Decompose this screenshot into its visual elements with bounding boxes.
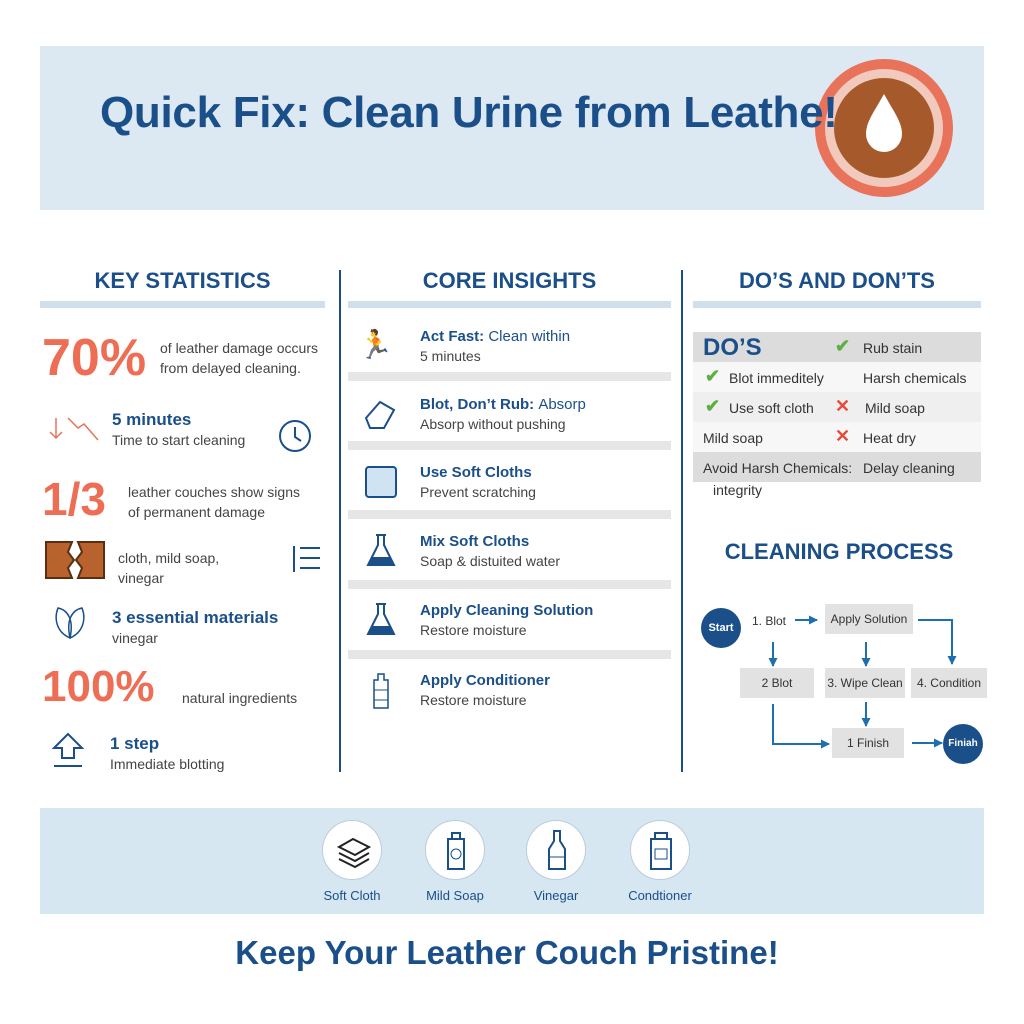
stat 100%: 100% [42, 662, 155, 711]
dos table: ✕ [835, 396, 850, 416]
insight 3 [365, 464, 536, 500]
insight 4: Mix Soft Cloths [420, 533, 529, 550]
stat 1/3: of permanent damage [128, 504, 265, 520]
flowchart: 4. Condition [917, 676, 981, 690]
dos table: Delay cleaning [863, 460, 955, 476]
material: soft cloth [322, 820, 382, 903]
dos table: Avoid Harsh Chemicals: [703, 460, 852, 476]
panel: do's and don'ts: DO’S AND DON’TS [739, 268, 935, 293]
insight 6: Restore moisture [420, 692, 527, 708]
insight 5: Restore moisture [420, 622, 527, 638]
insight 3: Prevent scratching [420, 484, 536, 500]
insight 4: Soap & distuited water [420, 553, 560, 569]
insight 6: Apply Conditioner [420, 672, 550, 689]
insight 5 [366, 602, 593, 638]
flowchart: Finiah [948, 738, 978, 749]
stat 70%: 70% [42, 329, 146, 387]
stat 70% [42, 329, 318, 387]
insight 3: Use Soft Cloths [420, 464, 532, 481]
stat essential: vinegar [112, 630, 158, 646]
material: soft cloth: Soft Cloth [323, 888, 381, 903]
dos table: ✔ [705, 396, 720, 416]
dos table: ✔ [705, 366, 720, 386]
stat 1 step: 1 step [110, 734, 159, 753]
dos table: ✔ [835, 336, 850, 356]
dos table: Mild soap [703, 430, 763, 446]
insight 4 [366, 533, 560, 569]
dos table: Heat dry [863, 430, 916, 446]
stat essential: 3 essential materials [112, 608, 278, 627]
header panel [40, 46, 984, 210]
stat 1 step [52, 732, 224, 772]
material: conditioner: Condtioner [628, 888, 692, 903]
dos table: Rub stain [863, 340, 922, 356]
footer tagline: Keep Your Leather Couch Pristine! [235, 934, 779, 971]
flowchart: Apply Solution [831, 612, 907, 626]
title: Quick Fix: Clean Urine from Leathe! [100, 88, 838, 137]
stat 1/3: 1/3 [42, 473, 106, 525]
material: vinegar [526, 820, 586, 903]
insight 1: 5 minutes [420, 348, 481, 364]
stat 5 minutes: 5 minutes [112, 410, 191, 429]
flowchart: 3. Wipe Clean [827, 676, 903, 690]
stat 1/3 [42, 473, 300, 525]
insight 5: Apply Cleaning Solution [420, 602, 593, 619]
panel: core insights [348, 268, 671, 709]
insight 2: Blot, Don’t Rub: Absorp [420, 396, 586, 413]
panel: key statistics [40, 268, 325, 772]
insight 2: Absorp without pushing [420, 416, 566, 432]
icon: leather drop [815, 59, 953, 197]
stat 1/3: leather couches show signs [128, 484, 300, 500]
stat 5 minutes: Time to start cleaning [112, 432, 245, 448]
panel: do's and don'ts [693, 268, 981, 308]
material: mild soap: Mild Soap [426, 888, 484, 903]
material: mild soap [425, 820, 485, 903]
stat materials: vinegar [118, 570, 164, 586]
stat essential [55, 607, 278, 646]
dos table: Mild soap [865, 400, 925, 416]
flowchart [701, 604, 987, 764]
divider [339, 270, 341, 772]
stat materials [45, 541, 320, 586]
flowchart: Start [708, 622, 734, 634]
stat 100% [42, 662, 297, 711]
heading: cleaning process: CLEANING PROCESS [725, 539, 953, 564]
panel: key statistics: KEY STATISTICS [94, 268, 271, 293]
dos table: integrity [713, 482, 762, 498]
dos table: Use soft cloth [729, 400, 814, 416]
dos table: Harsh chemicals [863, 370, 966, 386]
insight 6 [373, 672, 550, 709]
insight 2 [364, 396, 586, 432]
insight 1 [358, 328, 570, 364]
flowchart: 2 Blot [762, 676, 792, 690]
stat 1 step: Immediate blotting [110, 756, 224, 772]
stat 70%: from delayed cleaning. [160, 360, 301, 376]
flowchart: 1 Finish [847, 736, 889, 750]
insight 1: 🏃 [358, 329, 393, 360]
stat materials: cloth, mild soap, [118, 550, 219, 566]
dos table: Blot immeditely [729, 370, 824, 386]
stat 100%: natural ingredients [182, 690, 297, 706]
stat 70%: of leather damage occurs [160, 340, 318, 356]
panel: core insights: CORE INSIGHTS [423, 268, 596, 293]
insight 1: Act Fast: Clean within [420, 328, 570, 345]
dos table: ✕ [835, 426, 850, 446]
footer band: materials [40, 808, 984, 914]
material: vinegar: Vinegar [534, 888, 578, 903]
material: conditioner [628, 820, 692, 903]
dos table: DO’S [703, 334, 762, 361]
stat 5 minutes [50, 410, 311, 452]
flowchart: 1. Blot [752, 614, 786, 628]
dos table [693, 332, 981, 498]
